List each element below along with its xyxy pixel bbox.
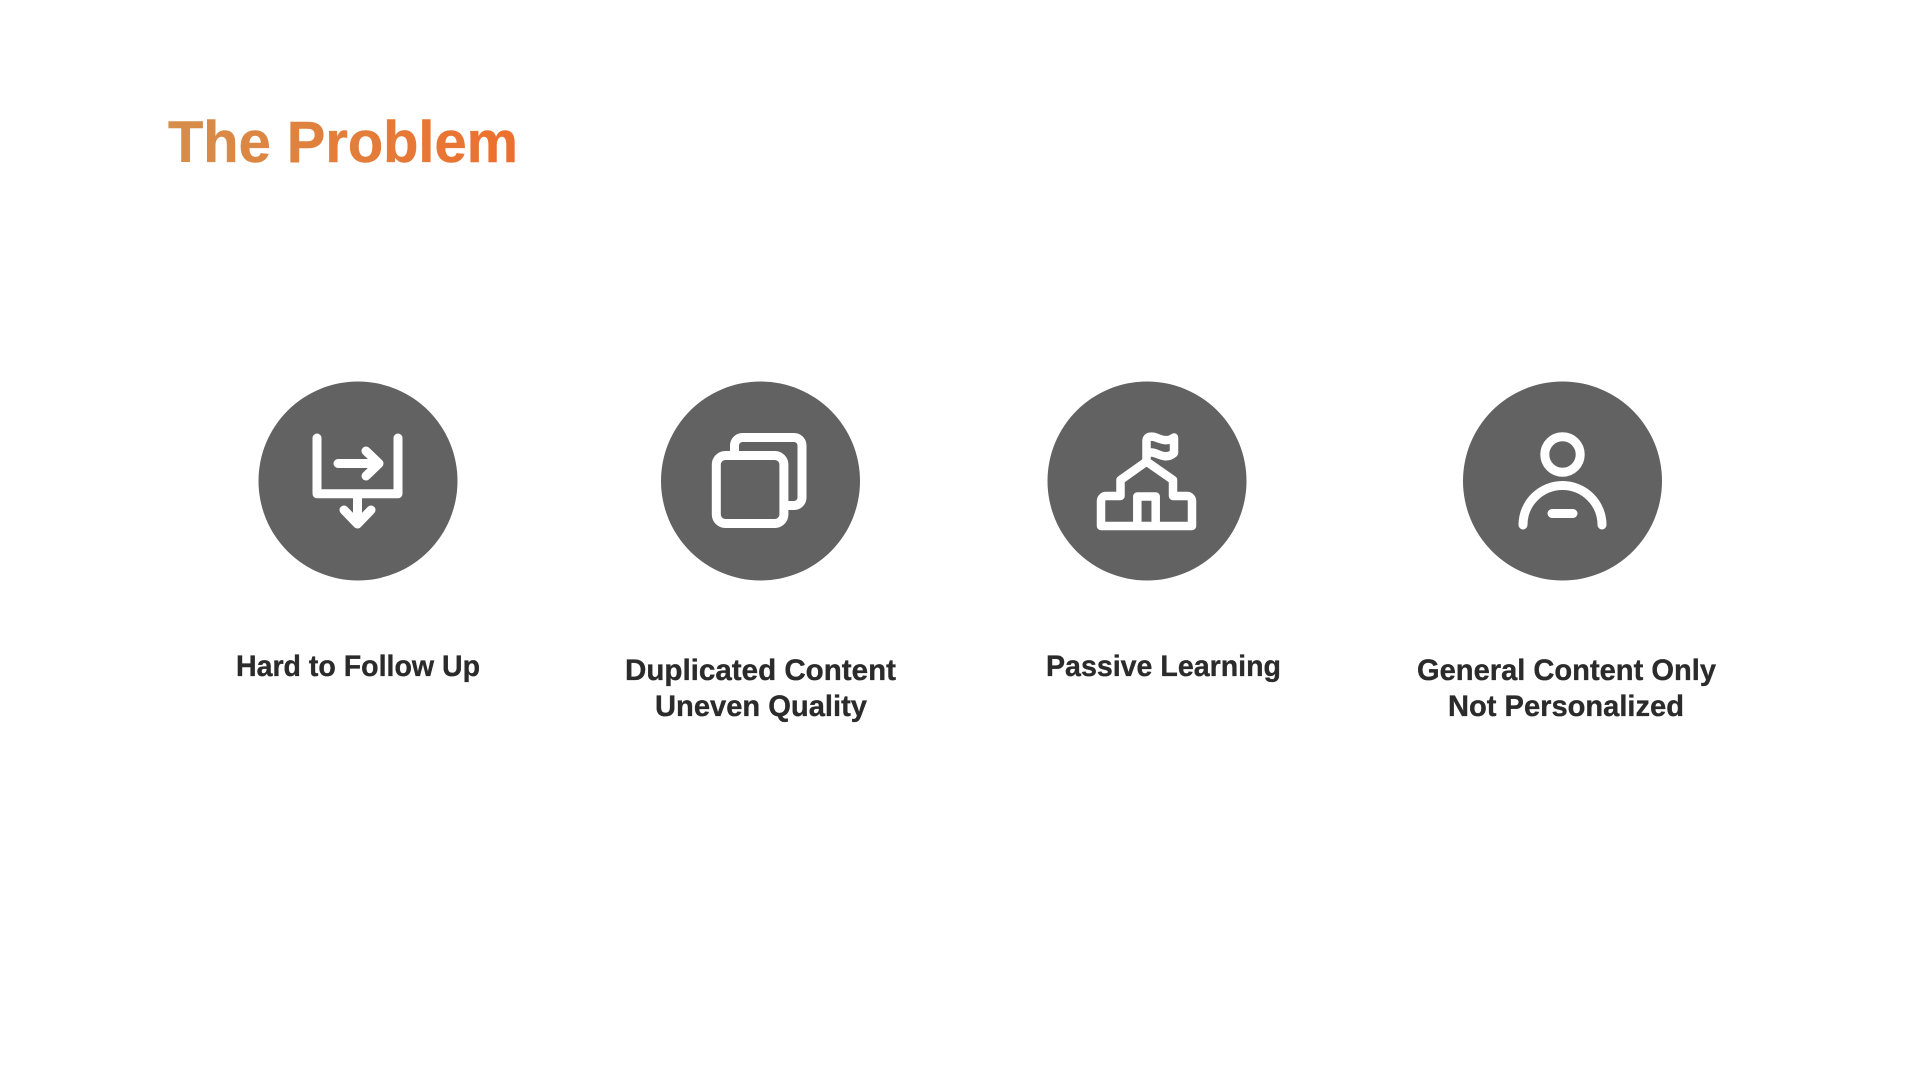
label: duplicated content, uneven quality: Duplicated Content: [625, 654, 896, 687]
label: hard to follow up: Hard to Follow Up: [236, 650, 480, 683]
icon: person with minus in circle: [1463, 382, 1662, 580]
label: duplicated content, uneven quality: Uneven Quality: [655, 690, 868, 723]
icon: duplicate squares in circle: [661, 382, 860, 580]
panel: duplicated content: [625, 382, 896, 723]
label: general content only, not personalized: Not Personalized: [1448, 690, 1684, 723]
panel: general content: [1417, 382, 1717, 723]
icon: follow up arrows in circle: [258, 382, 458, 580]
label: duplicated content, uneven quality: [625, 654, 896, 723]
title: The Problem: [168, 110, 518, 175]
label: general content only, not personalized: [1417, 654, 1717, 723]
label: general content only, not personalized: General Content Only: [1417, 654, 1717, 687]
icon: school building in circle: [1048, 382, 1246, 580]
panel: hard to follow up: [236, 382, 480, 683]
label: passive learning: Passive Learning: [1046, 650, 1281, 683]
panel: passive learning: [1046, 382, 1281, 683]
